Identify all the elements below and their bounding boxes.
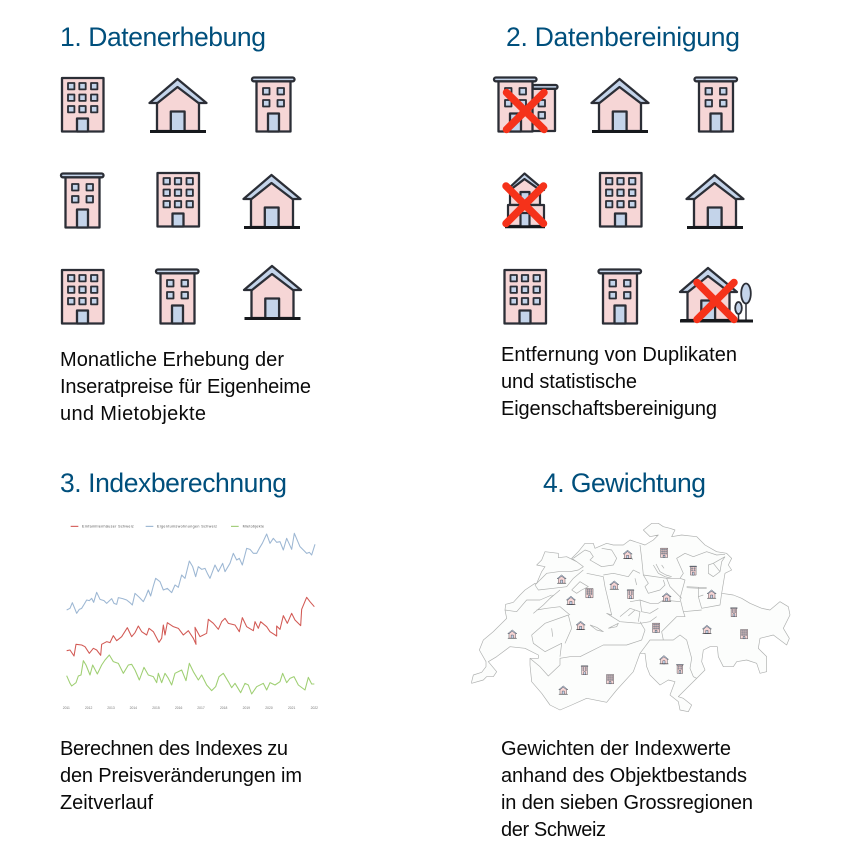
chart legend [71, 525, 264, 529]
x axis years: 2012 [85, 706, 93, 710]
text block: step 1 description: Inseratpreise für Eigenheime [60, 376, 311, 398]
icon grid: nine buildings [61, 78, 301, 324]
icon: apartment block [504, 270, 546, 324]
panel: step 1 data collection [60, 22, 311, 425]
icon: house [592, 79, 648, 132]
icon: house with trees crossed out [680, 268, 753, 321]
x axis years: 2013 [107, 706, 115, 710]
text block: step 2 description [501, 344, 737, 420]
heading: 2. Datenbereinigung: 2. Datenbereinigung [506, 22, 740, 52]
text block: step 2 description: Eigenschaftsbereinigung [501, 398, 717, 420]
heading: 4. Gewichtung: 4. Gewichtung [543, 468, 706, 498]
panel: step 2 data cleaning [494, 22, 753, 420]
text block: step 4 description: der Schweiz [501, 819, 606, 841]
icon: overlapping houses crossed out [505, 174, 545, 227]
x axis years: 2022 [311, 706, 318, 710]
text block: step 1 description: Monatliche Erhebung der [60, 349, 284, 371]
x axis years: 2017 [197, 706, 205, 710]
icon: apartment block [694, 78, 737, 132]
chart legend: Eigentumswohnungen Schweiz [157, 525, 217, 529]
chart legend: Mietobjekte [243, 525, 264, 529]
x axis years: 2016 [175, 706, 183, 710]
map icons: apartment blocks [581, 548, 748, 684]
text block: step 4 description [501, 738, 753, 841]
x axis years: 2011 [63, 706, 70, 710]
text block: step 4 description: Gewichten der Indexwerte [501, 738, 731, 760]
text block: step 4 description: anhand des Objektbestands [501, 765, 747, 787]
text block: step 1 description [60, 349, 311, 425]
heading: 3. Indexberechnung: 3. Indexberechnung [60, 468, 287, 498]
heading: 1. Datenerhebung: 1. Datenerhebung [60, 22, 266, 52]
x axis years: 2015 [152, 706, 160, 710]
panel: step 3 index calculation [60, 468, 318, 814]
x axis years: 2019 [243, 706, 250, 710]
text block: step 1 description: und Mietobjekte [60, 403, 206, 425]
map: Switzerland with seven large regions [472, 523, 790, 712]
x axis years: 2014 [130, 706, 137, 710]
panel: step 4 weighting [472, 468, 790, 841]
icon: duplicate apartment blocks crossed out [494, 78, 558, 132]
chart legend: Einfamilienhäuser Schweiz [82, 525, 134, 529]
map outline and regional borders [472, 523, 790, 712]
line: Mietobjekte [67, 655, 314, 694]
line chart: price indices 2011 to 2022 [63, 525, 318, 710]
text block: step 2 description: und statistische [501, 371, 637, 393]
icon: house [686, 175, 744, 228]
line: Einfamilienhäuser [67, 597, 314, 656]
x axis years: 2021 [288, 706, 296, 710]
text block: step 2 description: Entfernung von Duplikaten [501, 344, 737, 366]
text block: step 3 description [60, 738, 302, 814]
text block: step 4 description: in den sieben Grossregionen [501, 792, 753, 814]
text block: step 3 description: Berechnen des Indexes zu [60, 738, 288, 760]
icon: apartment block [600, 173, 642, 226]
x axis years: 2018 [220, 706, 228, 710]
x axis years [63, 706, 318, 710]
x axis years: 2020 [265, 706, 273, 710]
text block: step 3 description: den Preisveränderungen im [60, 765, 302, 787]
line: Eigentumswohnungen [67, 533, 315, 613]
icon: apartment block [598, 270, 641, 324]
map icons: houses [508, 550, 716, 694]
text block: step 3 description: Zeitverlauf [60, 792, 153, 814]
